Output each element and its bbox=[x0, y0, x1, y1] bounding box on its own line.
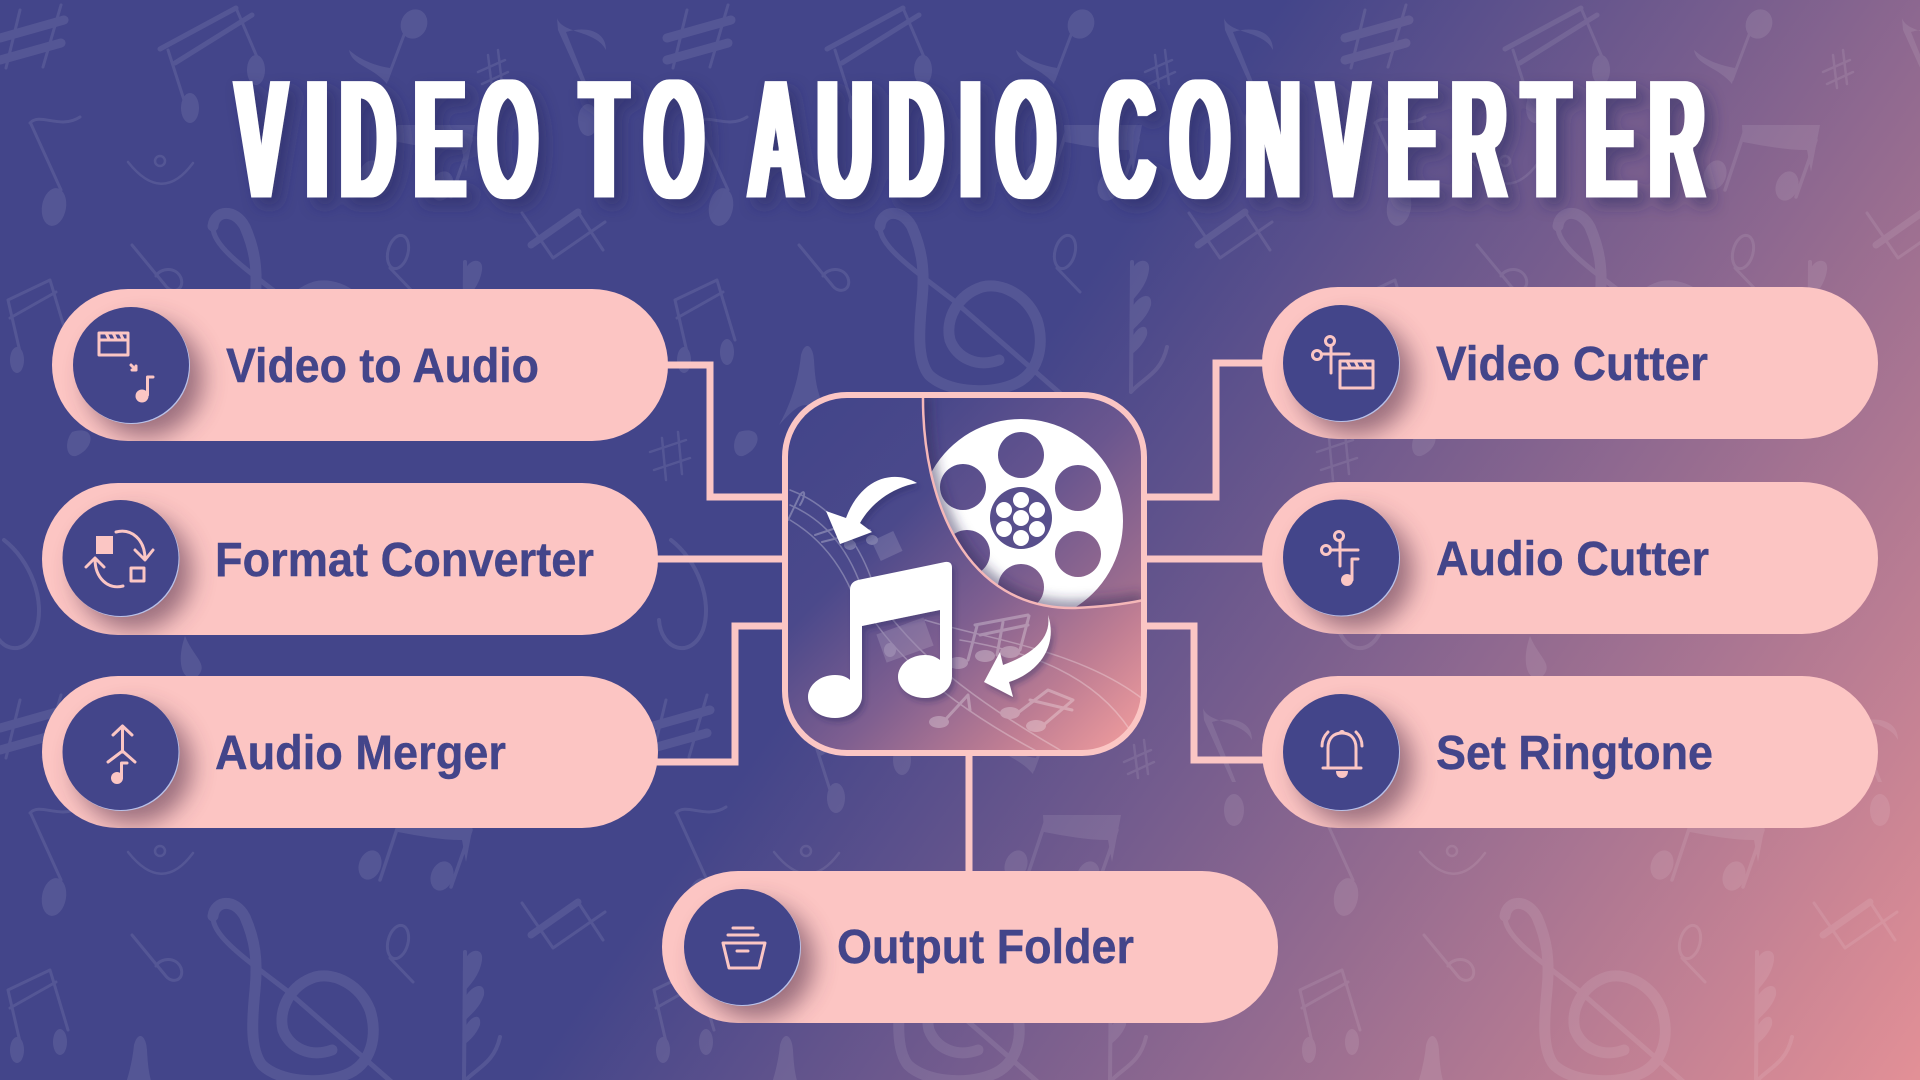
label: Audio Merger bbox=[215, 727, 506, 780]
pill: Format Converter bbox=[42, 483, 658, 635]
label: Output Folder bbox=[837, 921, 1134, 974]
film reel bbox=[932, 419, 1123, 607]
arrow: video to audio bbox=[826, 477, 917, 544]
pill: Output Folder bbox=[662, 871, 1278, 1023]
title: VIDEO TO AUDIO CONVERTER bbox=[236, 44, 1704, 236]
label: Set Ringtone bbox=[1436, 727, 1713, 780]
label: Format Converter bbox=[215, 534, 594, 587]
icon: folder box bbox=[723, 928, 765, 968]
pill: Video Cutter bbox=[1262, 287, 1878, 439]
app icon tile bbox=[785, 395, 1144, 753]
icon: clapper to note bbox=[99, 333, 153, 402]
label: Video to Audio bbox=[226, 340, 539, 393]
pill: Audio Merger bbox=[42, 676, 658, 828]
icon: scissors and clapper bbox=[1312, 336, 1373, 388]
reel hub bbox=[990, 487, 1052, 549]
icon: scissors and note bbox=[1322, 532, 1358, 586]
label: Audio Cutter bbox=[1436, 533, 1709, 586]
connector lines bbox=[650, 363, 1270, 880]
pill: Video to Audio bbox=[52, 289, 668, 441]
icon: bell bbox=[1322, 730, 1362, 778]
music note bbox=[808, 562, 952, 718]
central app icon bbox=[785, 395, 1146, 753]
pill: Set Ringtone bbox=[1262, 676, 1878, 828]
icon frame bbox=[785, 395, 1144, 753]
curved panel with film reel bbox=[922, 398, 1141, 610]
icon: format convert bbox=[86, 531, 153, 587]
icon: merge bbox=[108, 726, 135, 784]
label: Video Cutter bbox=[1436, 338, 1708, 391]
pill: Audio Cutter bbox=[1262, 482, 1878, 634]
arrow: to music bbox=[984, 615, 1051, 697]
faint music staff bbox=[788, 490, 1144, 753]
